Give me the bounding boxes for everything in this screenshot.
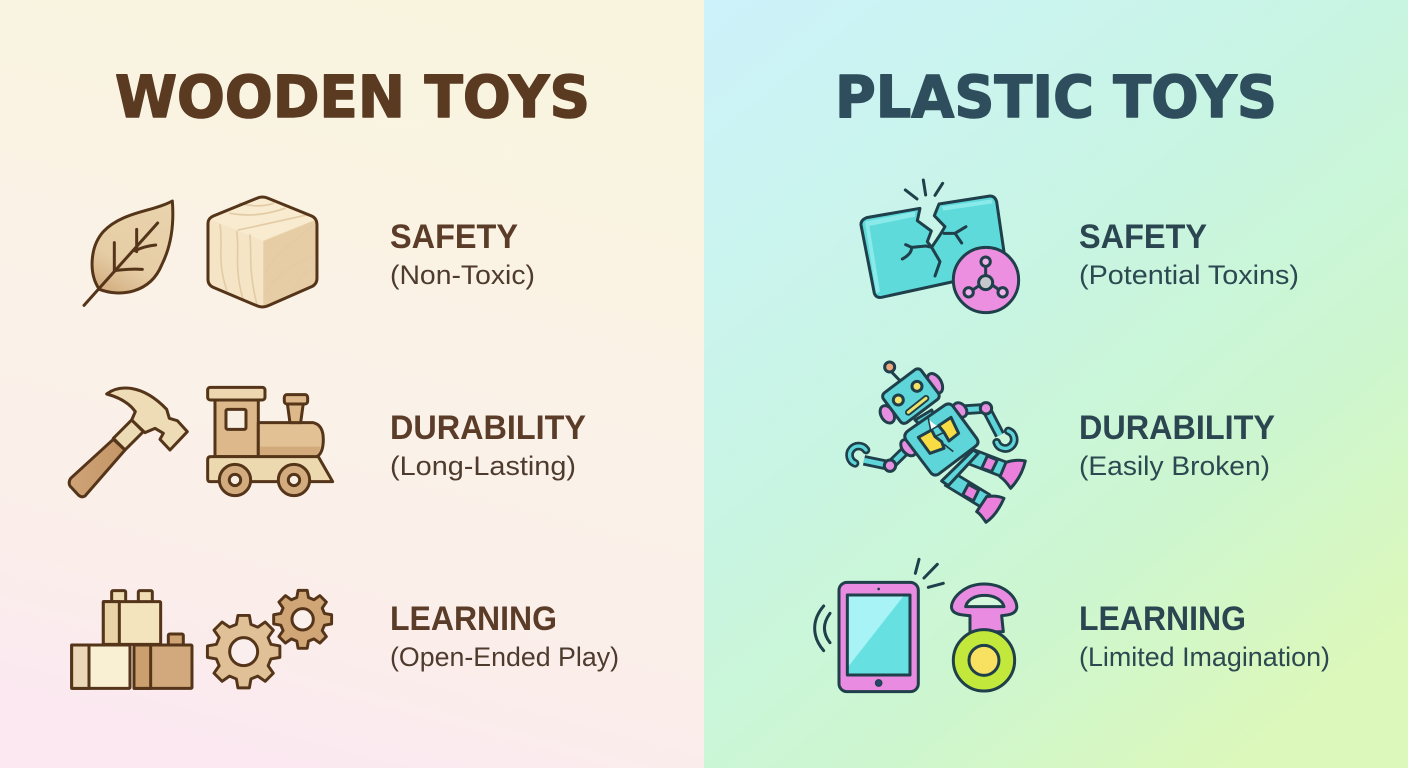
robot arms [850, 400, 1014, 471]
text: plastic safety: SAFETY [1079, 218, 1207, 256]
icon: wooden cube [208, 197, 317, 307]
icon: building blocks [72, 591, 192, 688]
text: wooden safety: SAFETY [390, 218, 518, 256]
text: wooden durability: (Long-Lasting) [390, 451, 576, 481]
panel: wooden toys background [0, 0, 704, 768]
text: wooden durability [390, 409, 586, 481]
icon: broken robot [850, 362, 1025, 522]
icon: leaf [84, 201, 173, 305]
icon: tablet with sound waves [815, 559, 943, 692]
text: plastic learning [1079, 600, 1330, 672]
icon: cracked plastic slab with toxin badge [861, 180, 1019, 313]
panel: plastic toys background [704, 0, 1408, 768]
text: wooden durability: DURABILITY [390, 409, 586, 447]
icon: pacifier rattle [952, 584, 1017, 691]
text: plastic learning: (Limited Imagination) [1079, 642, 1330, 672]
icon: gears [207, 590, 332, 688]
text: plastic learning: LEARNING [1079, 600, 1246, 638]
title: plastic toys: PLASTIC TOYS [835, 63, 1277, 131]
text: wooden learning [390, 600, 619, 672]
robot legs [942, 450, 1025, 522]
icon: toy train [208, 387, 333, 496]
text: wooden safety [390, 218, 535, 290]
text: plastic safety: (Potential Toxins) [1079, 260, 1299, 290]
text: plastic safety [1079, 218, 1299, 290]
text: wooden safety: (Non-Toxic) [390, 260, 535, 290]
icon: hammer [69, 388, 187, 497]
text: plastic durability: (Easily Broken) [1079, 451, 1270, 481]
text: plastic durability: DURABILITY [1079, 409, 1275, 447]
title: wooden toys: WOODEN TOYS [115, 63, 590, 131]
text: wooden learning: LEARNING [390, 600, 557, 638]
text: plastic durability [1079, 409, 1275, 481]
text: wooden learning: (Open-Ended Play) [390, 642, 619, 672]
